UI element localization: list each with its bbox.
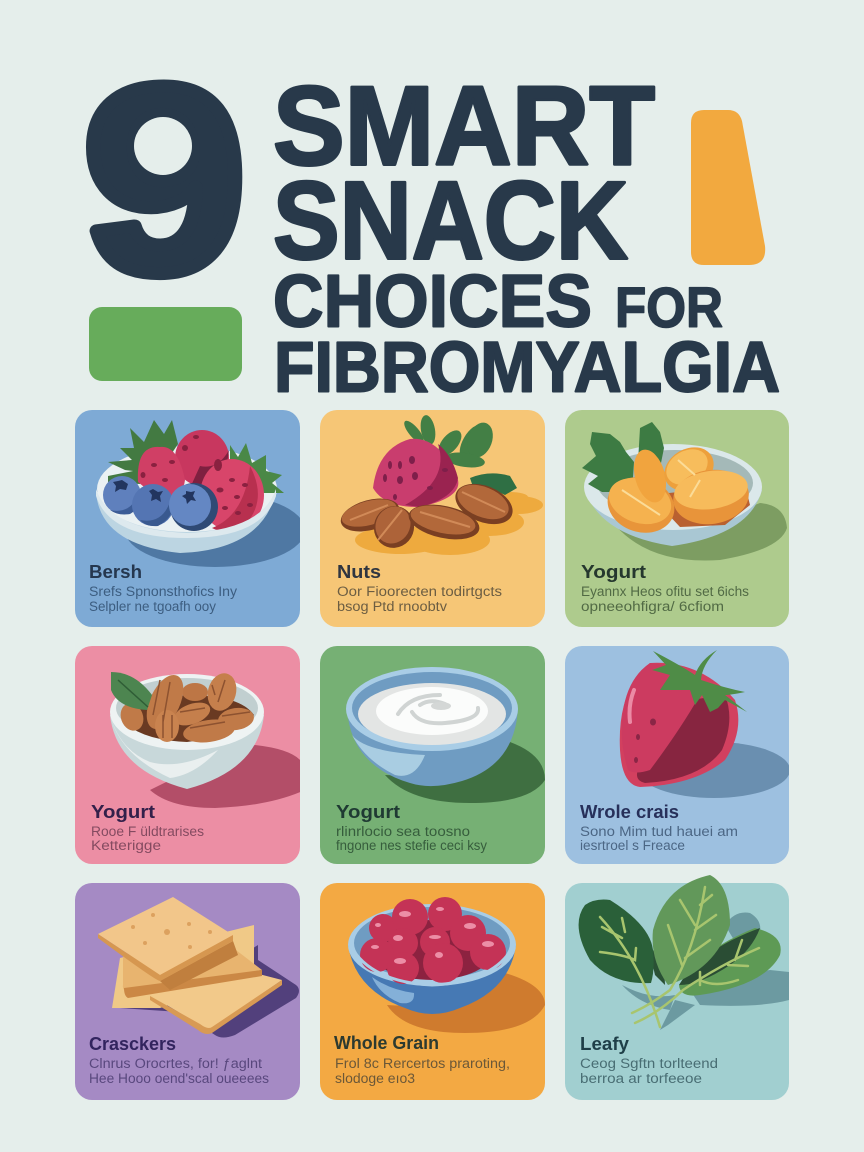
description: strawberry — [580, 824, 738, 853]
panel: orange slices — [565, 410, 789, 627]
label: leafy greens: Leafy — [580, 1034, 629, 1054]
label: berries: Bersh — [89, 562, 142, 582]
description: nuts: Oor Fioorecten todirtgcts — [337, 584, 502, 599]
description: leafy greens: Ceog Sgftn torlteend — [580, 1056, 718, 1071]
description: berries — [89, 584, 237, 614]
description: berries: Srefs Spnonsthofics Iny — [89, 584, 237, 599]
description: nuts: bsog Ptd rnoobtv — [337, 599, 447, 614]
description: yogurt bowl — [336, 824, 487, 853]
panel: crackers — [75, 883, 300, 1100]
icon: crackers — [98, 897, 299, 1038]
description: nuts — [337, 584, 502, 614]
description: yogurt bowl: fngone nes stefie ceci ksy — [336, 838, 487, 853]
description: crackers — [89, 1056, 269, 1086]
icon: spinach leaves — [579, 875, 789, 1030]
panel: yogurt bowl — [320, 646, 545, 864]
decorative orange shape — [691, 110, 765, 265]
panel: strawberry — [565, 646, 790, 864]
description: almonds bowl: Rooe F üldtrarises — [91, 824, 204, 839]
panel: leafy greens — [565, 875, 789, 1100]
description: leafy greens — [580, 1056, 718, 1086]
description: orange slices: opneeohfigra/ 6cfiom — [581, 599, 724, 614]
panel: red berries bowl — [320, 883, 545, 1100]
description: strawberry: Sono Mim tud hauei am — [580, 824, 738, 839]
description: crackers: Clnrus Orocrtes, for! ƒaglnt — [89, 1056, 262, 1071]
title: SMART — [273, 64, 655, 188]
title: FIBROMYALGIA — [274, 328, 780, 408]
label: crackers: Crasckers — [89, 1034, 176, 1054]
label: almonds bowl: Yogurt — [91, 802, 155, 822]
icon: berry bowl — [96, 420, 305, 567]
icon: red berries bowl — [348, 897, 545, 1033]
title: FOR — [615, 276, 723, 340]
panel: berries — [75, 410, 305, 627]
icon: almonds bowl — [110, 669, 305, 808]
description: red berries bowl: slodoge eıo3 — [335, 1071, 415, 1086]
description: almonds bowl: Ketterigge — [91, 838, 161, 853]
title: SNACK — [273, 160, 628, 282]
panel: nuts — [320, 410, 545, 627]
icon: strawberry and almonds — [337, 414, 543, 555]
description: orange slices — [581, 584, 749, 614]
description: strawberry: iesrtroel s Freace — [580, 838, 685, 853]
icon: strawberry — [620, 650, 790, 798]
panel: almonds bowl — [75, 646, 305, 864]
label: strawberry: Wrole crais — [580, 802, 679, 822]
description: crackers: Hee Hooo oend'scal oueeees — [89, 1071, 269, 1086]
label: yogurt bowl: Yogurt — [336, 802, 400, 822]
description: orange slices: Eyannx Heos ofitu set 6ichs — [581, 584, 749, 599]
decorative green bar — [89, 307, 242, 381]
label: nuts: Nuts — [337, 562, 381, 582]
description: red berries bowl — [335, 1056, 510, 1086]
big number 9: 9 — [83, 32, 246, 328]
description: yogurt bowl: rlinrlocio sea toosno — [336, 824, 470, 839]
description: leafy greens: berroa ar torfeeoe — [580, 1071, 702, 1086]
description: berries: Selpler ne tgoafh ooy — [89, 599, 216, 614]
label: orange slices: Yogurt — [581, 562, 646, 582]
icon: yogurt bowl — [346, 667, 545, 803]
label: red berries bowl: Whole Grain — [334, 1033, 439, 1053]
title: CHOICES — [273, 260, 592, 342]
icon: orange slices bowl — [582, 422, 787, 561]
title — [273, 64, 780, 408]
description: almonds bowl — [91, 824, 204, 853]
description: red berries bowl: Frol 8c Rercertos praroting, — [335, 1056, 510, 1071]
